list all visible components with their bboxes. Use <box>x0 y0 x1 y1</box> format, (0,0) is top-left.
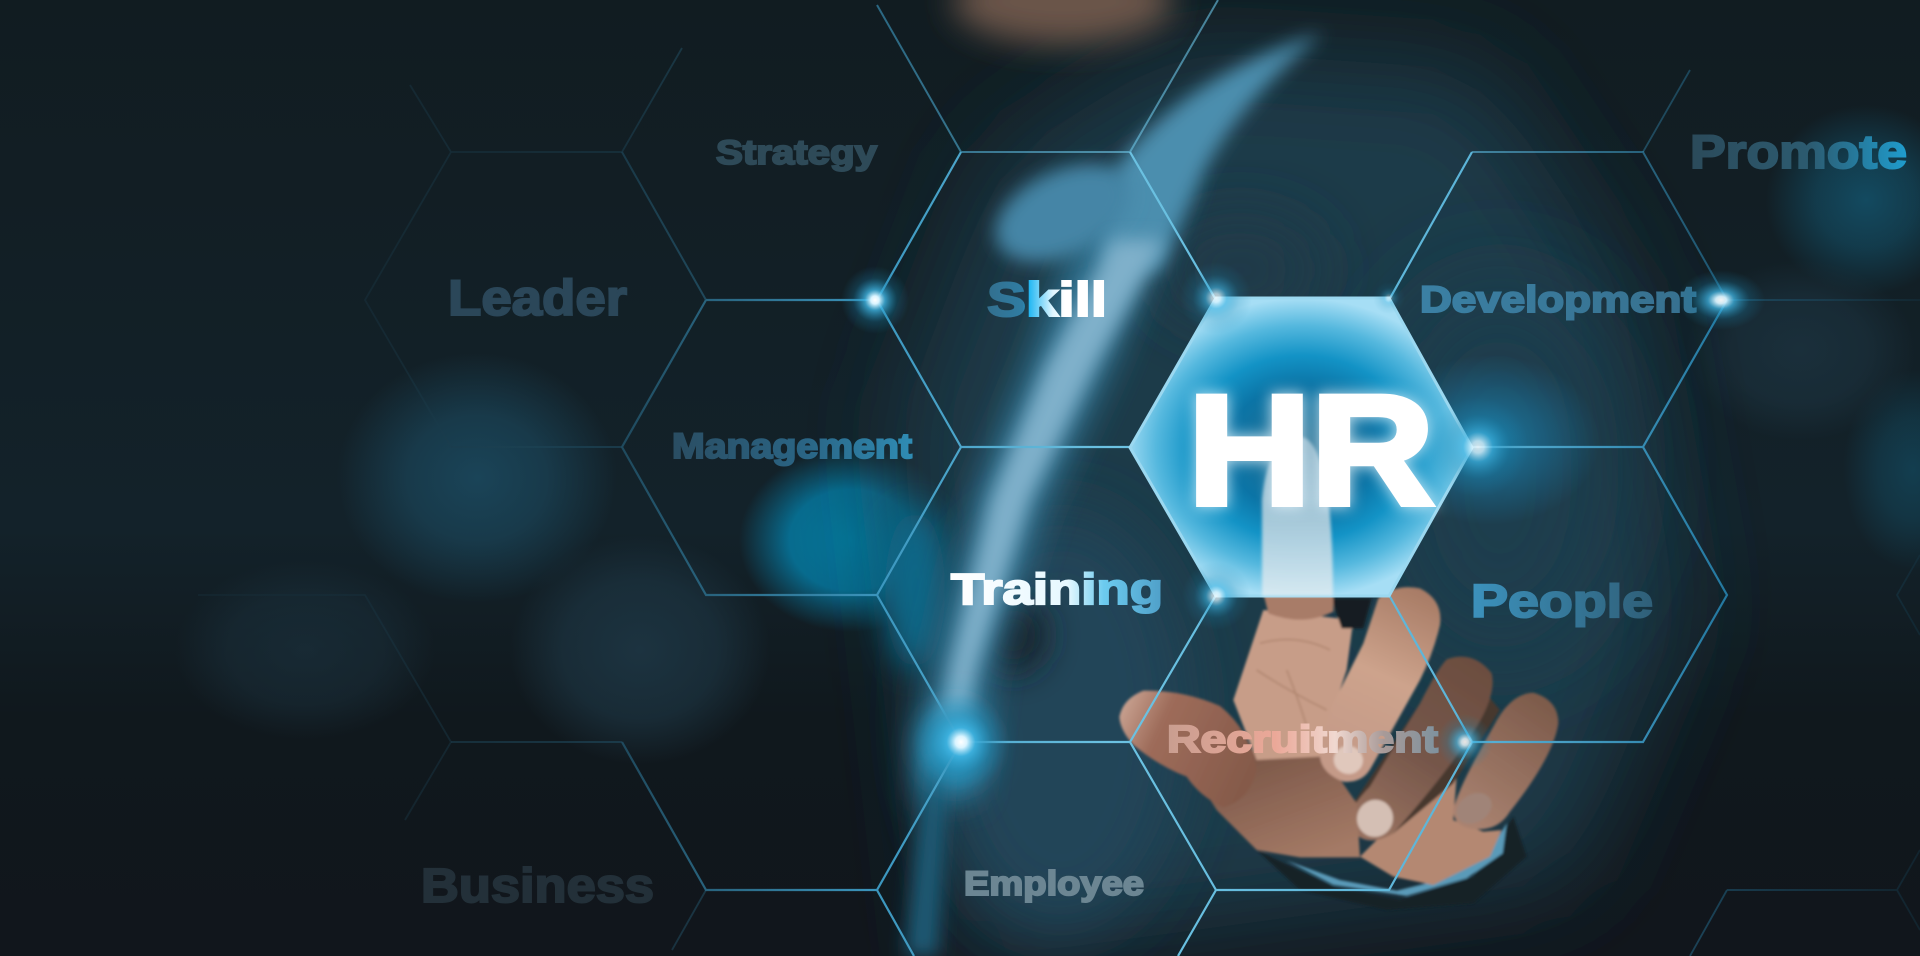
HR title: HR <box>1188 364 1434 538</box>
nails <box>1331 743 1497 842</box>
long stripe <box>935 240 1165 760</box>
label: Training: Training <box>951 565 1163 614</box>
central HR hexagon <box>1130 298 1472 596</box>
label: Development: Development <box>1420 279 1696 320</box>
label: Management: Management <box>672 427 912 466</box>
middle finger <box>1320 587 1440 782</box>
fingertip seen through hexagon <box>1262 437 1333 596</box>
pinky finger <box>1453 693 1558 829</box>
upper palm <box>1233 610 1353 760</box>
label: Skill: Skill <box>987 274 1107 327</box>
label: Promote: Promote <box>1690 125 1907 178</box>
back of hand <box>1360 777 1502 885</box>
thumb <box>1119 691 1257 807</box>
label: Recruitment: Recruitment <box>1167 719 1438 761</box>
stripe halo <box>915 170 1190 800</box>
cuff band <box>1287 823 1507 896</box>
label: Leader: Leader <box>448 270 627 326</box>
lapel streak <box>1101 33 1323 270</box>
lower stripe <box>905 760 950 956</box>
label: People: People <box>1471 575 1653 627</box>
node halo <box>921 707 989 783</box>
label: Employee: Employee <box>964 865 1144 903</box>
ring finger <box>1348 657 1493 840</box>
hexagon fill <box>1130 298 1472 596</box>
shirt collar and light stripe <box>905 33 1323 956</box>
shadow between fingers <box>1353 670 1500 833</box>
medium lattice <box>451 0 1727 742</box>
HR glow: HR <box>1188 364 1434 538</box>
cuff shadow <box>1257 817 1527 910</box>
blurred figure: suit and neck <box>885 0 1680 956</box>
collar <box>984 153 1121 273</box>
bokeh lights <box>175 105 1920 765</box>
label: Business: Business <box>421 860 654 913</box>
gap behind index finger <box>1332 598 1372 628</box>
index finger knuckle <box>1263 593 1333 620</box>
lower palm <box>1200 750 1360 857</box>
hand <box>1119 587 1558 910</box>
label: Strategy: Strategy <box>716 134 877 172</box>
palm creases <box>1257 640 1330 727</box>
bright lattice <box>622 152 1727 956</box>
glowing nodes <box>841 262 1765 790</box>
